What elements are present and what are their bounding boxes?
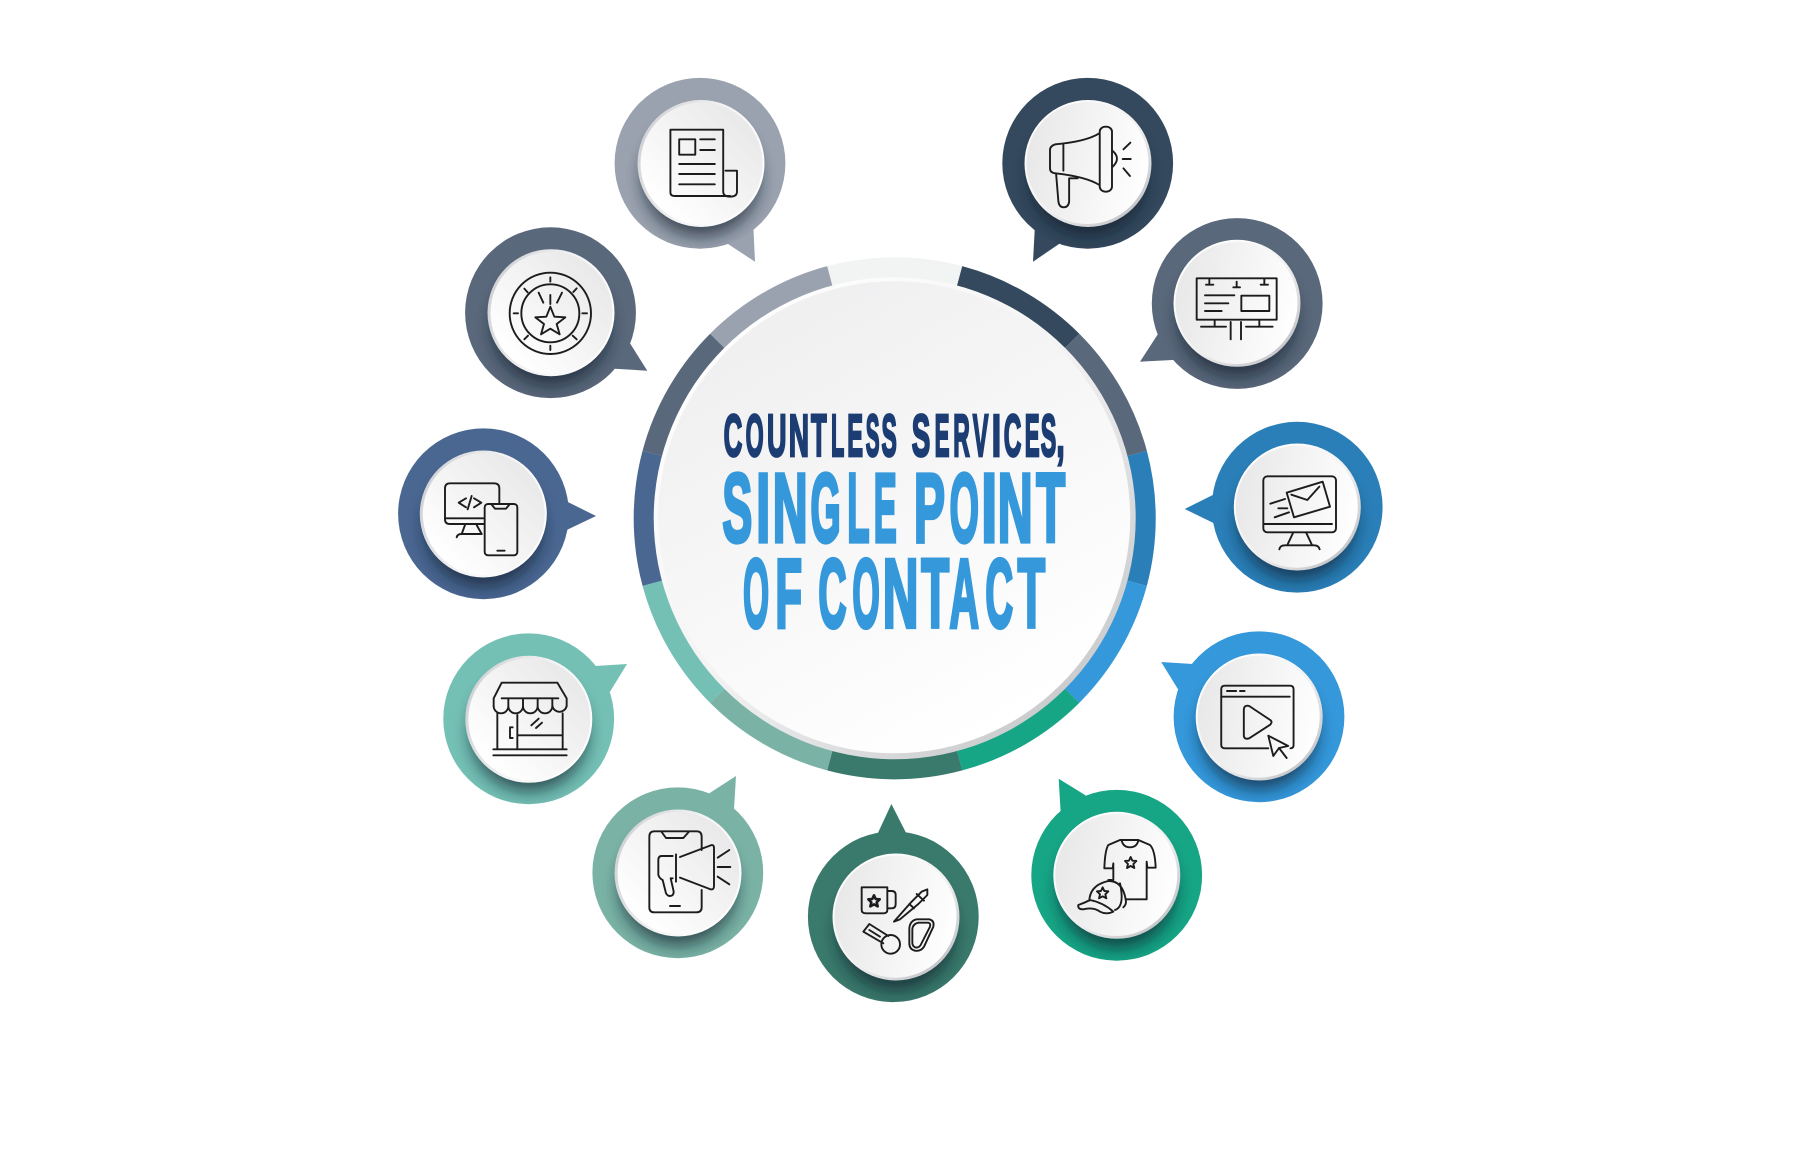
title: countless services, single point of contact: G — [810, 453, 841, 562]
title: countless services, single point of contact: E — [935, 402, 950, 469]
bubble: billboard — [1140, 218, 1323, 389]
title: countless services, single point of contact: L — [847, 453, 870, 562]
title: countless services, single point of contact: T — [921, 539, 949, 648]
icon: t-shirt and cap — [1078, 840, 1156, 913]
title: countless services, single point of contact: , — [1056, 402, 1065, 469]
title: countless services, single point of contact: A — [950, 539, 979, 648]
title: countless services, single point of contact: N — [883, 539, 918, 648]
title: countless services, single point of contact: I — [992, 402, 1001, 469]
title: countless services, single point of contact: N — [789, 402, 809, 469]
icon: megaphone — [1050, 127, 1131, 207]
title: countless services, single point of contact: V — [973, 402, 989, 469]
title: countless services, single point of contact: I — [756, 453, 770, 562]
text: T — [1036, 453, 1065, 562]
icon: star coin — [510, 273, 591, 354]
bubble: devices — [398, 428, 596, 599]
title: countless services, single point of contact: T — [1018, 539, 1045, 648]
bubble: star coin — [465, 227, 647, 398]
bubble: newspaper — [615, 78, 785, 262]
bubble: megaphone — [1002, 78, 1173, 262]
title: countless services, single point of contact: O — [743, 539, 769, 648]
title: countless services, single point of contact: O — [852, 539, 880, 648]
icon: newspaper — [670, 130, 737, 197]
title: countless services, single point of contact: C — [985, 539, 1013, 648]
icon: storefront — [493, 683, 567, 755]
icon: mug, pen, keychain, carabiner — [862, 887, 934, 954]
central hub: segmented ring and disc — [645, 268, 1145, 768]
title: countless services, single point of contact: S — [722, 453, 752, 562]
central disc — [654, 277, 1136, 759]
bubble: merchandise apparel — [1031, 779, 1202, 961]
segmented colour ring — [645, 268, 1145, 768]
icon: phone with megaphone — [649, 831, 730, 912]
title: countless services, single point of contact: F — [775, 539, 802, 648]
bubble: promotional items — [808, 804, 979, 1002]
title: countless services, single point of contact: C — [724, 402, 742, 469]
title: countless services, single point of contact: E — [847, 402, 863, 469]
title: countless services, single point of contact: S — [882, 402, 897, 469]
title: countless services, single point of contact: E — [1025, 402, 1040, 469]
bubble: phone promotion — [592, 776, 763, 958]
icon: devices — [445, 483, 517, 555]
title: countless services, single point of contact: S — [912, 402, 930, 469]
title: countless services, single point of contact: R — [953, 402, 970, 469]
title: countless services, single point of contact: P — [914, 453, 945, 562]
title: countless services, single point of contact: O — [950, 453, 979, 562]
title: countless services, single point of contact: N — [998, 453, 1033, 562]
title: countless services, single point of contact: S — [866, 402, 880, 469]
title: countless services, single point of contact: O — [746, 402, 764, 469]
bubble: video play — [1161, 631, 1344, 802]
title: countless services, single point of contact — [722, 402, 1065, 648]
title: countless services, single point of contact: S — [1041, 402, 1056, 469]
title: countless services, single point of contact: E — [874, 453, 897, 562]
icon: billboard — [1197, 278, 1277, 339]
title: countless services, single point of contact: C — [1004, 402, 1021, 469]
title: countless services, single point of contact: L — [831, 402, 844, 469]
bubble: storefront — [443, 633, 627, 804]
title: countless services, single point of contact: T — [811, 402, 827, 469]
bubble: email monitor — [1185, 422, 1383, 593]
title: countless services, single point of contact: N — [773, 453, 808, 562]
title: countless services, single point of contact: U — [767, 402, 786, 469]
icon: video play — [1221, 686, 1294, 758]
title: countless services, single point of contact: I — [981, 453, 997, 562]
title: countless services, single point of contact: C — [818, 539, 847, 648]
icon: email monitor — [1263, 476, 1336, 549]
